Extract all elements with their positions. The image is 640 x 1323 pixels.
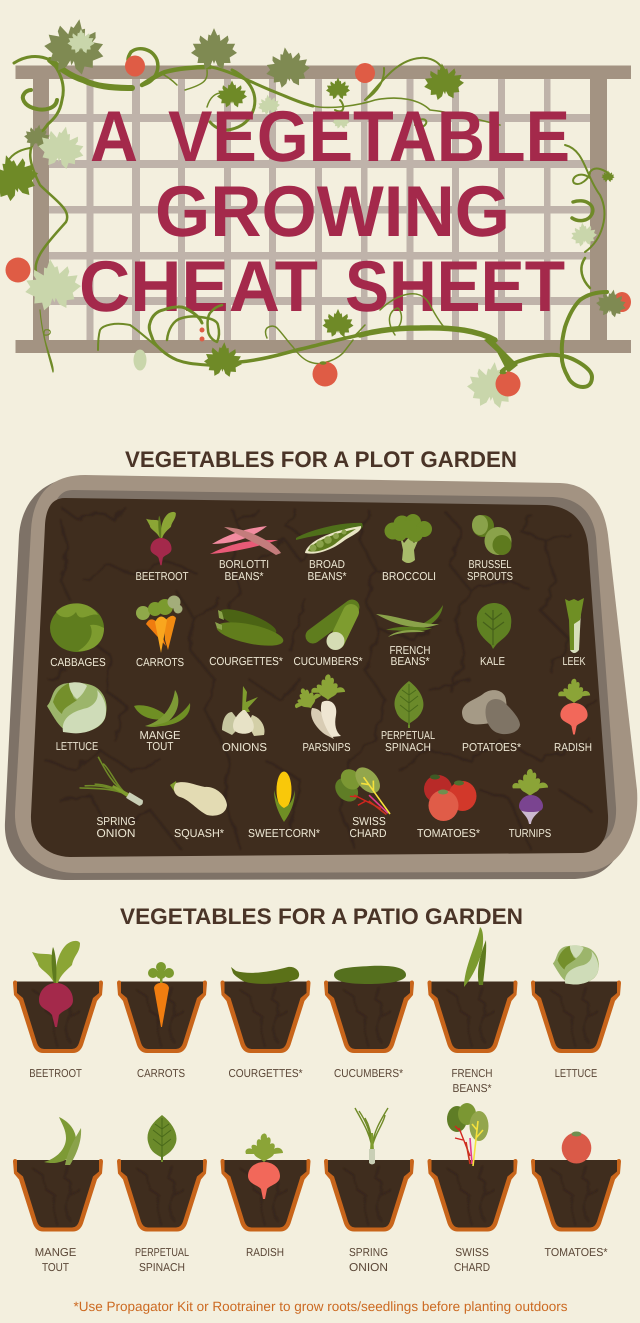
radish: RADISH — [554, 742, 592, 754]
pot: carrots: CARROTS — [137, 1068, 185, 1080]
courgettes — [209, 604, 285, 668]
carrots: CARROTS — [136, 657, 184, 669]
pot: swiss chard: SWISS — [455, 1247, 489, 1259]
pot: radish — [220, 1134, 310, 1259]
kale — [477, 603, 511, 668]
borlotti beans: BEANS* — [224, 571, 264, 583]
mange tout: TOUT — [146, 741, 174, 753]
footnote: *Use Propagator Kit or Rootrainer to grow roots/seedlings before planting outdoors — [74, 1299, 568, 1314]
potatoes: POTATOES* — [462, 742, 521, 754]
pot: swiss chard — [428, 1103, 518, 1274]
turnips: TURNIPS — [509, 828, 552, 840]
broad beans — [296, 523, 363, 583]
parsnips — [289, 674, 351, 754]
cucumbers — [294, 607, 363, 668]
leek: LEEK — [562, 656, 586, 668]
brussel sprouts: BRUSSEL — [468, 559, 512, 571]
pot: mange tout — [13, 1117, 103, 1274]
cucumbers: CUCUMBERS* — [294, 656, 363, 668]
brussel sprouts: SPROUTS — [467, 571, 513, 583]
perpetual spinach — [381, 681, 435, 754]
pot: cucumbers: CUCUMBERS* — [334, 1068, 403, 1080]
parsnips: PARSNIPS — [302, 742, 351, 754]
pot: swiss chard: CHARD — [454, 1262, 490, 1274]
pot: beetroot: BEETROOT — [29, 1068, 82, 1080]
lettuce: LETTUCE — [56, 741, 99, 753]
pot: lettuce — [531, 945, 621, 1080]
broad beans: BROAD — [309, 559, 345, 571]
spring onion — [80, 757, 151, 840]
cabbages: CABBAGES — [50, 657, 106, 669]
broad beans: BEANS* — [308, 571, 347, 583]
courgettes: COURGETTES* — [209, 656, 283, 668]
borlotti beans: BORLOTTI — [219, 559, 269, 571]
pot: mange tout: MANGE — [35, 1247, 77, 1259]
title: A — [90, 97, 138, 177]
panel: patio pots row two — [13, 1103, 621, 1274]
heading: patio garden: VEGETABLES FOR A PATIO GARDEN — [120, 904, 523, 929]
pot: mange tout: TOUT — [42, 1262, 69, 1274]
brussel sprouts — [467, 515, 513, 583]
sweetcorn — [248, 772, 320, 840]
spring onion: ONION — [96, 828, 136, 840]
pot: beetroot — [13, 941, 103, 1080]
squash: SQUASH* — [174, 828, 224, 840]
swiss chard: SWISS — [352, 816, 386, 828]
onions — [222, 686, 267, 754]
tomato calyx — [320, 361, 506, 374]
pot: spring onion: SPRING — [349, 1247, 388, 1259]
pot: spring onion — [324, 1108, 414, 1274]
sweetcorn: SWEETCORN* — [248, 828, 320, 840]
squash — [170, 781, 227, 840]
panel: plot garden bed — [5, 475, 637, 880]
kale: KALE — [480, 656, 505, 668]
vines and leaves: bottom — [40, 292, 607, 410]
radish — [554, 679, 592, 754]
mange tout: MANGE — [140, 730, 181, 742]
title — [79, 97, 570, 327]
beetroot: BEETROOT — [136, 571, 188, 583]
turnips — [509, 769, 552, 840]
pot: french beans — [428, 927, 518, 1095]
pot: courgettes — [220, 967, 310, 1080]
pot: spring onion: ONION — [349, 1262, 388, 1274]
leek — [562, 598, 586, 668]
trellis — [16, 66, 631, 353]
title: GROWING — [155, 172, 510, 252]
onions: ONIONS — [222, 742, 267, 754]
thick vine stem — [484, 337, 518, 373]
cabbages — [50, 603, 106, 669]
carrots — [136, 596, 184, 669]
perpetual spinach: SPINACH — [385, 742, 431, 754]
panel: patio pots row one — [13, 927, 621, 1095]
french beans — [376, 605, 443, 668]
pot: perpetual spinach: SPINACH — [139, 1262, 185, 1274]
french beans: FRENCH — [390, 645, 430, 657]
pot: perpetual spinach — [117, 1115, 207, 1274]
tomatoes: TOMATOES* — [417, 828, 480, 840]
tomatoes — [417, 774, 480, 840]
mange tout — [134, 690, 190, 753]
pot: perpetual spinach: PERPETUAL — [135, 1247, 189, 1259]
swiss chard — [329, 757, 402, 840]
pot: tomatoes: TOMATOES* — [544, 1247, 608, 1259]
pot: carrots — [117, 962, 207, 1080]
pot: french beans: BEANS* — [452, 1083, 492, 1095]
pot: tomatoes — [531, 1132, 621, 1259]
swiss chard: CHARD — [350, 828, 386, 840]
pot: courgettes: COURGETTES* — [228, 1068, 303, 1080]
pot: french beans: FRENCH — [452, 1068, 492, 1080]
broccoli — [382, 514, 436, 583]
potatoes — [462, 690, 521, 754]
french beans: BEANS* — [390, 656, 430, 668]
borlotti beans — [210, 526, 281, 583]
pot: lettuce: LETTUCE — [555, 1068, 598, 1080]
pot: cucumbers — [324, 966, 414, 1080]
perpetual spinach: PERPETUAL — [381, 730, 435, 742]
title: VEGETABLE — [168, 97, 570, 177]
pot: radish: RADISH — [246, 1247, 284, 1259]
beetroot — [136, 512, 188, 583]
vines and leaves: top and sides — [0, 14, 631, 319]
spring onion: SPRING — [96, 816, 136, 828]
broccoli: BROCCOLI — [382, 571, 436, 583]
title: CHEAT — [79, 247, 318, 327]
title: SHEET — [345, 247, 565, 327]
lettuce — [47, 682, 107, 753]
heading: plot garden: VEGETABLES FOR A PLOT GARDEN — [125, 447, 517, 472]
